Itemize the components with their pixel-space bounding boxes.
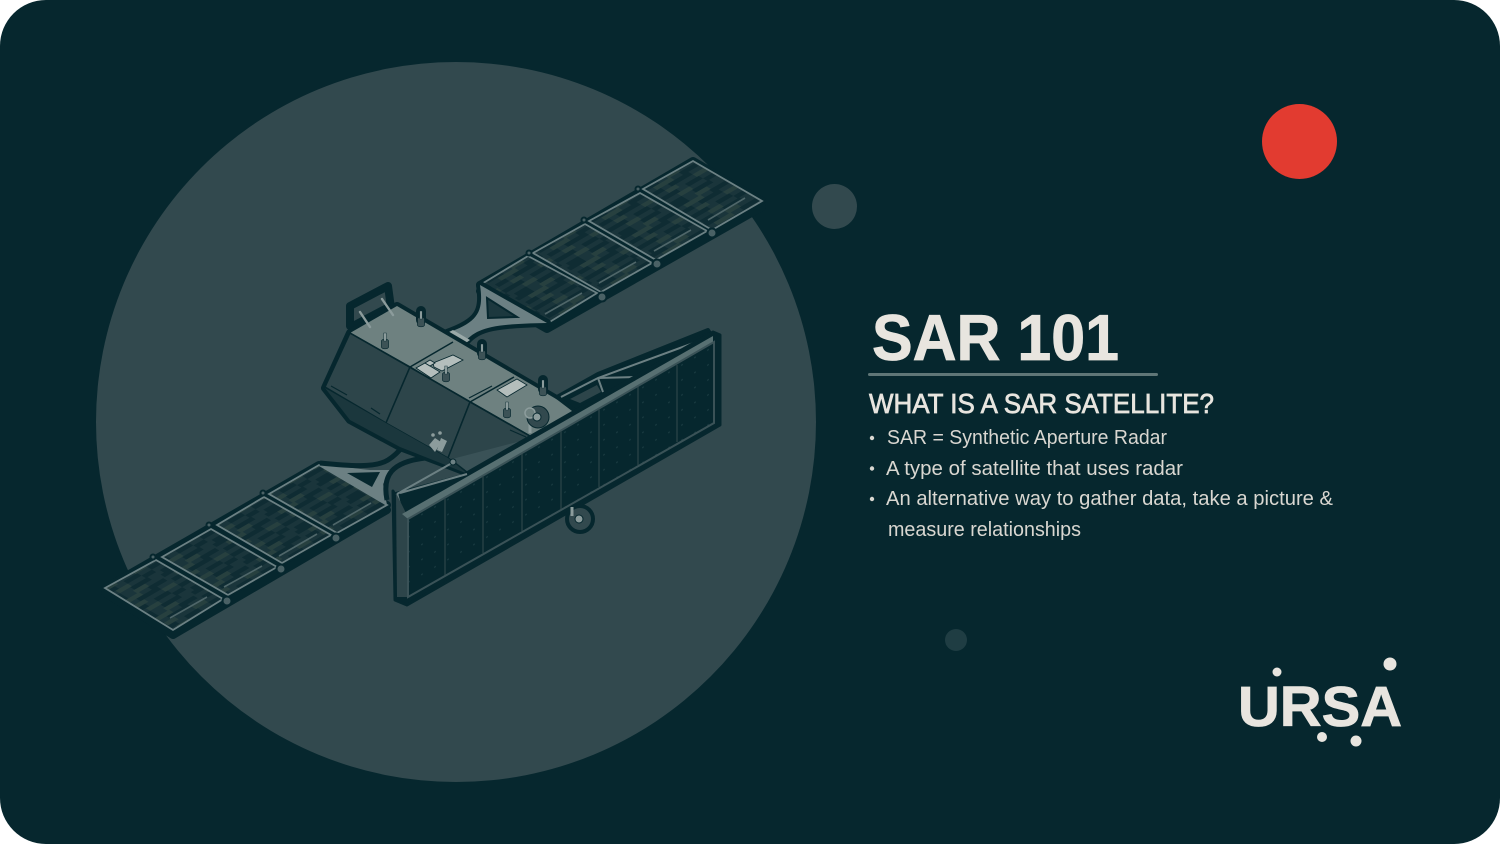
upper solar wing xyxy=(480,161,762,329)
side stickers xyxy=(429,431,447,452)
left truss xyxy=(396,459,467,513)
bullet 1: SAR = Synthetic Aperture Radar xyxy=(887,427,1167,449)
top face stickers xyxy=(416,355,527,397)
top face xyxy=(350,306,575,436)
radar antenna panel xyxy=(393,330,720,605)
title underline xyxy=(868,373,1158,376)
satellite bus xyxy=(325,306,575,474)
red circle xyxy=(1262,104,1337,179)
antenna face xyxy=(408,342,714,597)
large background circle xyxy=(96,62,816,782)
URSA logo: URSA xyxy=(1238,675,1402,739)
antenna segments xyxy=(445,365,677,575)
top pins xyxy=(382,311,546,418)
lower wing arm and cables xyxy=(319,446,425,505)
lower solar wing xyxy=(105,465,387,635)
bullet 3: measure relationships xyxy=(888,519,1081,541)
bullet 3: An alternative way to gather data, take a picture & xyxy=(886,488,1334,510)
bottom dish antenna xyxy=(567,506,593,532)
title: SAR 101 xyxy=(872,301,1119,374)
upper wing arm xyxy=(447,285,547,345)
underside xyxy=(325,388,468,474)
bullet 3 xyxy=(870,488,1334,541)
bracket struts xyxy=(360,299,393,327)
rear bracket xyxy=(350,286,392,330)
bullet list xyxy=(870,427,1334,541)
bullet 2: A type of satellite that uses radar xyxy=(886,458,1183,480)
satellite illustration xyxy=(105,161,762,635)
light edge strip xyxy=(402,336,713,519)
top dish antenna xyxy=(525,406,549,433)
small circle: upper xyxy=(812,184,857,229)
small circle: lower xyxy=(945,629,967,651)
side faces xyxy=(325,333,530,472)
side face xyxy=(396,493,408,597)
subheading: WHAT IS A SAR SATELLITE? xyxy=(869,388,1214,419)
right truss xyxy=(557,330,713,413)
